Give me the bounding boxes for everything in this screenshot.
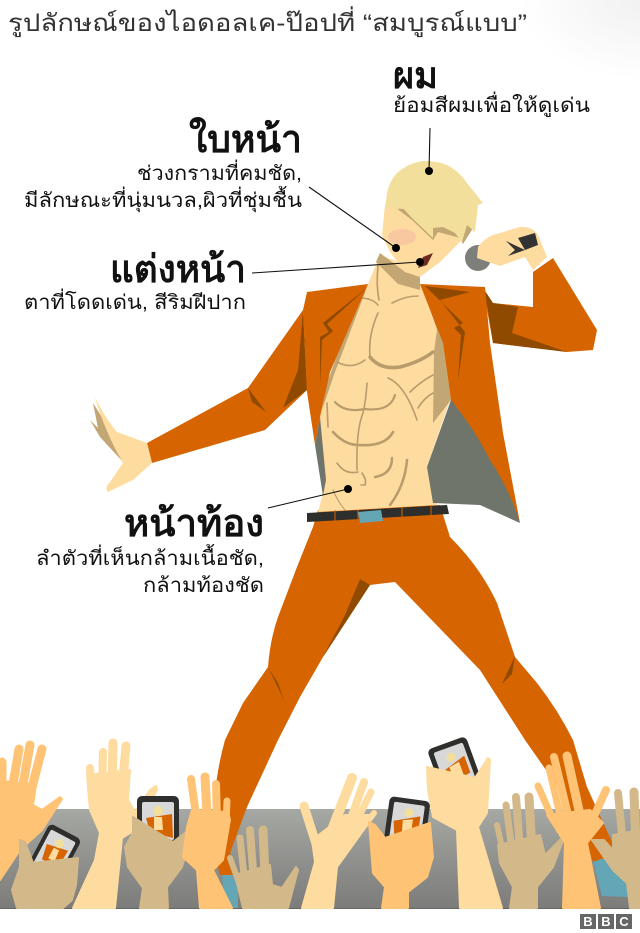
hand holding phone 2 <box>125 817 194 908</box>
label: makeup: ตาที่โดดเด่น, สีริมฝีปาก <box>24 288 246 314</box>
face <box>382 205 475 277</box>
jacket: left panel <box>303 284 368 445</box>
left arm sleeve <box>147 310 307 463</box>
left hand <box>90 397 152 492</box>
crowd hands <box>0 736 640 908</box>
belt <box>307 505 449 523</box>
phone in hand 2 <box>137 796 179 844</box>
legs: orange trousers <box>213 505 628 908</box>
label: abdomen: หน้าท้อง <box>124 503 264 545</box>
label: hair <box>393 55 590 175</box>
label: face: ช่วงกรามที่คมชัด, <box>137 159 302 185</box>
label: makeup: แต่งหน้า <box>110 249 246 291</box>
label: abdomen: กล้ามท้องชัด <box>143 575 264 597</box>
BBC logo <box>580 914 632 929</box>
label: face: มีลักษณะที่นุ่มนวล,ผิวที่ชุ่มชื้น <box>24 186 302 213</box>
microphone and raised hand <box>465 227 547 271</box>
hand holding phone 3 <box>369 822 433 908</box>
phone in hand 1 <box>27 823 82 884</box>
right arm sleeve <box>483 258 597 352</box>
torso <box>318 253 451 512</box>
hand: orange right <box>538 756 606 908</box>
hand: tan right-centre <box>497 797 565 908</box>
hair <box>385 161 483 242</box>
figure: K-pop idol <box>90 161 628 908</box>
hand: left raised <box>73 743 157 908</box>
label: abdomen: ลำตัวที่เห็นกล้ามเนื้อชัด, <box>36 544 264 570</box>
label: abdomen <box>36 485 352 597</box>
phone in hand 4 <box>427 736 483 797</box>
BBC logo: B <box>601 914 611 929</box>
hand holding phone 1 <box>12 840 78 908</box>
stage floor <box>0 809 640 909</box>
BBC logo: B <box>583 914 593 929</box>
title: รูปลักษณ์ของไอดอลเค-ป๊อปที่ “สมบูรณ์แบบ” <box>8 6 527 38</box>
label: makeup <box>24 249 424 314</box>
hand: far left <box>0 745 62 880</box>
jacket: right panel <box>420 284 520 523</box>
hand: orange centre-left <box>183 777 232 908</box>
label: face <box>24 117 400 252</box>
hand holding phone 4 <box>427 758 502 908</box>
BBC logo: C <box>619 914 629 929</box>
hand: right-centre raised <box>302 778 374 908</box>
label: face: ใบหน้า <box>189 117 302 161</box>
label: hair: ย้อมสีผมเพื่อให้ดูเด่น <box>393 91 590 118</box>
phone in hand 3 <box>383 796 431 851</box>
label: hair: ผม <box>393 55 438 96</box>
hand: tan centre-left <box>230 830 298 908</box>
jacket: lining <box>427 400 520 523</box>
hand: tan far right <box>592 792 640 908</box>
